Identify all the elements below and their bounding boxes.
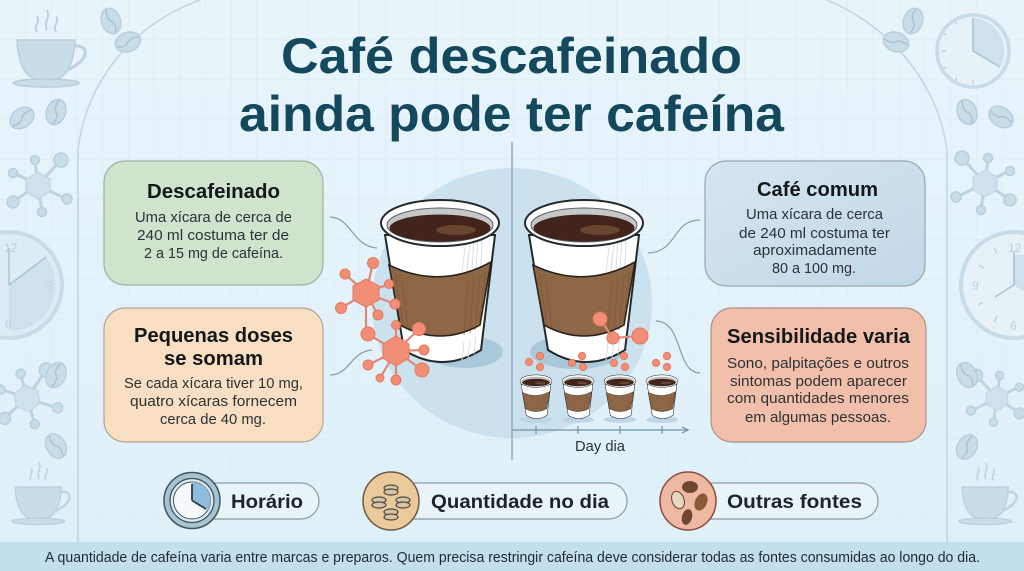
title — [239, 28, 785, 142]
icon: caffeine tablets — [363, 472, 419, 530]
panel: sensibilidade varia: sintomas podem aparecer — [730, 374, 907, 390]
decorative icons: right column: 6 — [1010, 319, 1017, 333]
cup: regular — [525, 200, 643, 369]
panel: pequenas doses — [104, 308, 323, 442]
central comparison illustration — [330, 142, 700, 460]
factor: quantidade no dia: Quantidade no dia — [431, 492, 609, 513]
panel: café comum — [705, 161, 925, 286]
panel: descafeinado — [104, 161, 323, 285]
panel: sensibilidade varia: Sono, palpitações e outros — [727, 356, 909, 372]
decorative icons: left column: 12 — [4, 241, 18, 255]
regular cup dots — [525, 312, 671, 371]
cup: decaf — [381, 200, 503, 368]
factor: horário: Horário — [231, 492, 303, 513]
day axis: Day dia — [575, 439, 626, 455]
decorative icons: right column: 9 — [972, 279, 979, 293]
decorative icons: left column — [0, 6, 143, 525]
panel: café comum: 80 a 100 mg. — [772, 261, 856, 277]
day axis — [512, 426, 688, 455]
panel: café comum: Uma xícara de cerca — [746, 207, 884, 223]
title: ainda pode ter cafeína — [239, 86, 785, 142]
panel: sensibilidade varia: em algumas pessoas. — [745, 410, 891, 426]
title: Café descafeinado — [281, 28, 742, 84]
panel: pequenas doses: se somam — [164, 348, 263, 370]
panel: sensibilidade varia — [711, 308, 926, 442]
panel: descafeinado: 240 ml costuma ter de — [137, 228, 289, 244]
backdrop circle — [372, 168, 652, 438]
panel: café comum: aproximadamente — [753, 243, 877, 259]
panel: pequenas doses: cerca de 40 mg. — [160, 412, 266, 428]
factor: outras fontes — [660, 472, 878, 530]
panel: café comum: Café comum — [757, 179, 878, 201]
factor: outras fontes: Outras fontes — [727, 492, 862, 513]
panel: pequenas doses: Se cada xícara tiver 10 mg, — [124, 376, 303, 392]
panel: descafeinado: Uma xícara de cerca de — [135, 210, 292, 226]
decorative icons: left column: 6 — [5, 317, 12, 331]
footer note — [0, 542, 1024, 571]
panel: pequenas doses: quatro xícaras fornecem — [130, 394, 297, 410]
connector lines — [330, 217, 700, 375]
panel: sensibilidade varia: Sensibilidade varia — [727, 326, 911, 348]
caffeine molecules — [336, 258, 429, 385]
panel: sensibilidade varia: com quantidades menores — [727, 391, 909, 407]
icon: coffee beans — [660, 472, 716, 530]
icon: clock — [164, 472, 220, 528]
small cups — [520, 375, 678, 423]
footer note: A quantidade de cafeína varia entre marcas e preparos. Quem precisa restringir cafeína deve considerar todas as fontes consumidas ao longo do dia. — [45, 550, 980, 566]
center divider — [511, 142, 513, 460]
panel: descafeinado: 2 a 15 mg de cafeína. — [144, 246, 283, 262]
panel: café comum: de 240 ml costuma ter — [739, 226, 890, 242]
decorative icons: right column: 12 — [1008, 241, 1022, 255]
panel: pequenas doses: Pequenas doses — [134, 325, 293, 347]
decorative icons: left column: 3 — [46, 279, 53, 293]
factor: quantidade no dia — [363, 472, 627, 530]
factor: horário — [164, 472, 319, 528]
panel: descafeinado: Descafeinado — [147, 181, 280, 203]
decorative icons: right column — [881, 6, 1024, 525]
